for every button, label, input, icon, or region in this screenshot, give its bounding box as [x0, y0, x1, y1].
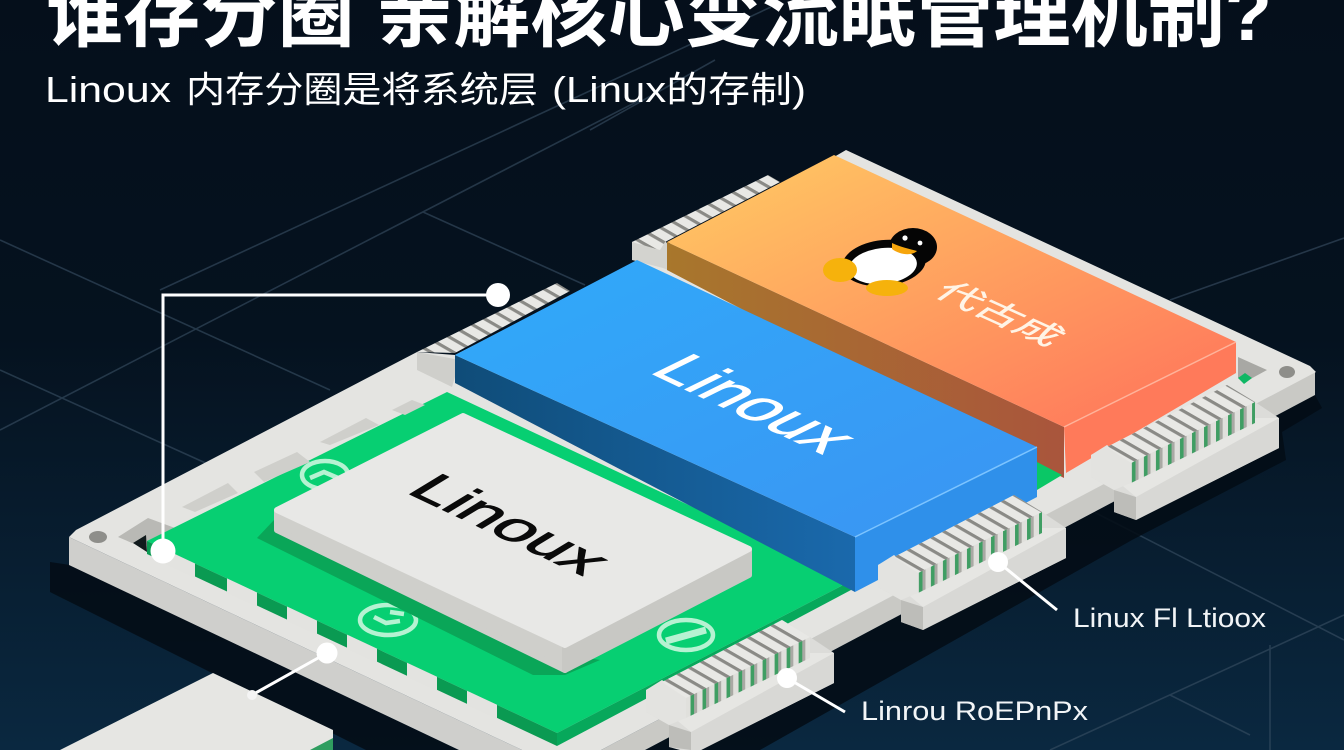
chip top [277, 416, 749, 645]
board frame walls [69, 537, 522, 750]
pcb surface [147, 392, 851, 733]
icon: penguin [823, 228, 937, 296]
left recess [118, 518, 175, 545]
callout: top left leader [150, 283, 510, 564]
chip label: Linoux [394, 466, 626, 583]
callout: bottom connector: Linrou RoEPnPx [861, 696, 1089, 726]
white chip [277, 416, 749, 670]
subtitle: Linoux [45, 69, 171, 110]
orange top [667, 155, 1236, 427]
orange label: 代古成 [926, 277, 1073, 352]
callout: small chip leader [247, 642, 338, 700]
frame teeth over pcb [165, 549, 497, 719]
blue right wall [855, 447, 1037, 592]
connector: back left [417, 175, 780, 387]
pcb wall right [557, 581, 851, 746]
blue block [455, 260, 1037, 592]
orange front wall [667, 242, 1064, 478]
callout: bottom connector [777, 668, 1089, 726]
subtitle [45, 69, 806, 110]
board shadow [50, 395, 1322, 750]
blue front wall [455, 355, 855, 592]
connector: bottom [646, 620, 834, 750]
callout: middle connector: Linux Fl Ltioox [1073, 603, 1267, 633]
pcb wall left [147, 541, 557, 746]
board [50, 150, 1322, 750]
connector: middle [878, 495, 1066, 630]
subtitle: 内存分圈是将系统层 [186, 69, 538, 110]
blue label: Linoux [635, 345, 877, 461]
orange block [667, 155, 1236, 478]
chip walls [277, 511, 565, 670]
orange right wall [1064, 342, 1236, 473]
pcb icons [302, 461, 713, 650]
right recess [1238, 357, 1267, 382]
frame corner holes [89, 366, 1295, 543]
frame slabs [182, 400, 425, 512]
blue top [455, 260, 1037, 537]
icon: circle left [302, 461, 348, 489]
callout: middle connector [988, 552, 1267, 633]
icon: circle middle [360, 605, 416, 635]
green circuit board [147, 392, 851, 746]
chip shadow [257, 520, 600, 675]
board frame top [69, 150, 1316, 750]
connector: right [1091, 385, 1279, 520]
icon: circle right [659, 620, 713, 650]
subtitle: (Linux的存制) [552, 69, 806, 110]
green gap [1037, 462, 1062, 490]
small chip bottom left [60, 673, 333, 750]
